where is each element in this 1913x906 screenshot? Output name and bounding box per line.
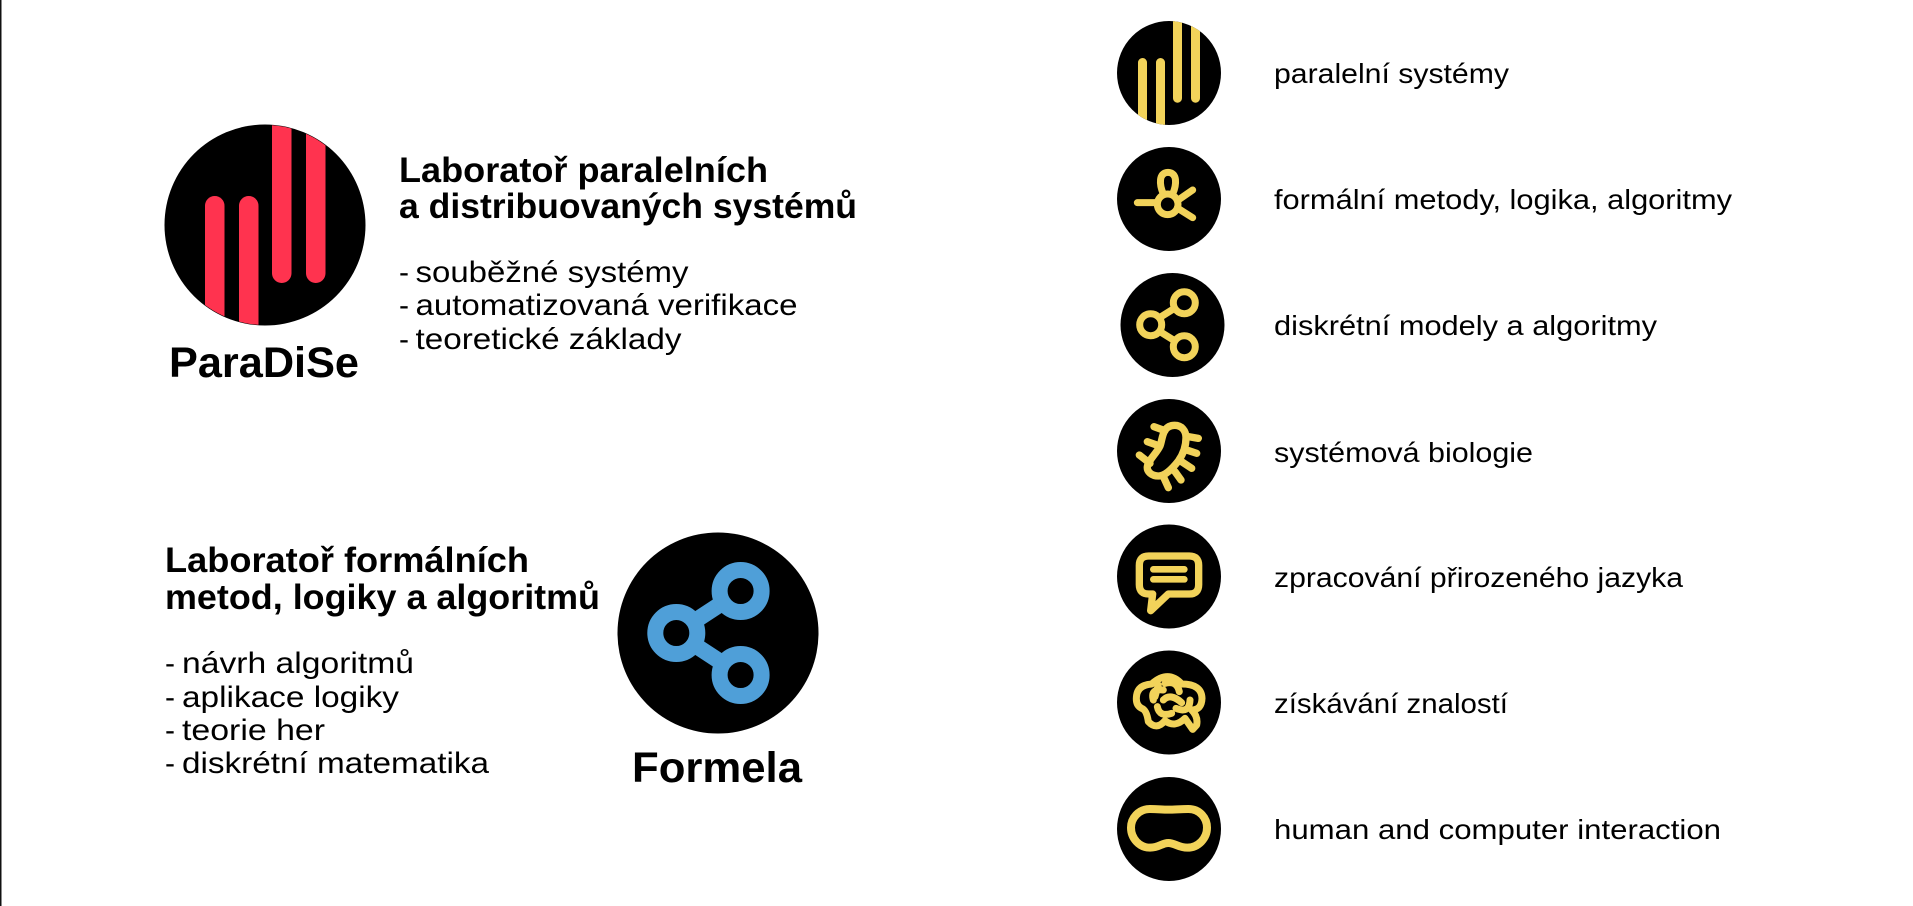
icon: graph nodes [1120, 273, 1224, 377]
topic: parallel systems [1117, 21, 1509, 125]
label: získávání znalostí [1274, 688, 1508, 719]
label: zpracování přirozeného jazyka [1274, 562, 1683, 593]
list: ParaDiSe topics: teoretické základy [416, 323, 682, 356]
list: Formela topics: návrh algoritmů [182, 647, 414, 680]
heading: ParaDiSe lab title: Laboratoř paralelních [399, 151, 768, 190]
name: Formela: Formela [632, 744, 803, 792]
label: human and computer interaction [1274, 814, 1721, 845]
list: Formela topics: teorie her [182, 714, 325, 747]
heading: ParaDiSe lab title: a distribuovaných systémů [399, 187, 857, 226]
list: Formela topics [165, 647, 489, 780]
list: Formela topics: aplikace logiky [182, 681, 399, 714]
label: diskrétní modely a algoritmy [1274, 310, 1657, 341]
list: ParaDiSe topics: automatizovaná verifikace [416, 289, 798, 322]
heading: Formela lab title: Laboratoř formálních [165, 541, 529, 580]
icon: brain [1117, 650, 1221, 754]
panel: Formela lab [165, 532, 818, 792]
heading: Formela lab title: metod, logiky a algoritmů [165, 578, 600, 617]
list: Formela topics: diskrétní matematika [182, 747, 489, 780]
heading: Formela lab title [165, 541, 600, 617]
list: Formela topics: - [165, 747, 175, 780]
heading: ParaDiSe lab title [399, 151, 857, 226]
icon: bacterium [1117, 399, 1221, 503]
topic: formal methods [1117, 147, 1732, 251]
list: ParaDiSe topics: - [399, 256, 409, 289]
list: ParaDiSe topics [399, 256, 798, 356]
topic: knowledge acquisition [1117, 650, 1508, 754]
topic: natural language processing [1117, 524, 1683, 628]
icon: speech bubble [1117, 524, 1221, 628]
icon: VR headset [1117, 777, 1221, 881]
topic: human and computer interaction [1117, 777, 1721, 881]
label: paralelní systémy [1274, 58, 1509, 89]
label: formální metody, logika, algoritmy [1274, 184, 1732, 215]
icon: parallel bars [1117, 21, 1221, 125]
topic: systems biology [1117, 399, 1533, 503]
panel: research topics [1117, 10, 1732, 881]
list: ParaDiSe topics: - [399, 289, 409, 322]
list: Formela topics: - [165, 681, 175, 714]
list: Formela topics: - [165, 714, 175, 747]
panel: ParaDiSe lab [164, 124, 855, 378]
list: ParaDiSe topics: - [399, 323, 409, 356]
topic: discrete models [1120, 273, 1657, 377]
list: ParaDiSe topics: souběžné systémy [416, 256, 688, 289]
label: systémová biologie [1274, 437, 1533, 468]
icon: Formela logo [618, 532, 818, 734]
name: ParaDiSe: ParaDiSe [169, 339, 359, 387]
icon: ParaDiSe logo [164, 124, 366, 326]
icon: logic symbol [1117, 147, 1221, 251]
list: Formela topics: - [165, 647, 175, 680]
